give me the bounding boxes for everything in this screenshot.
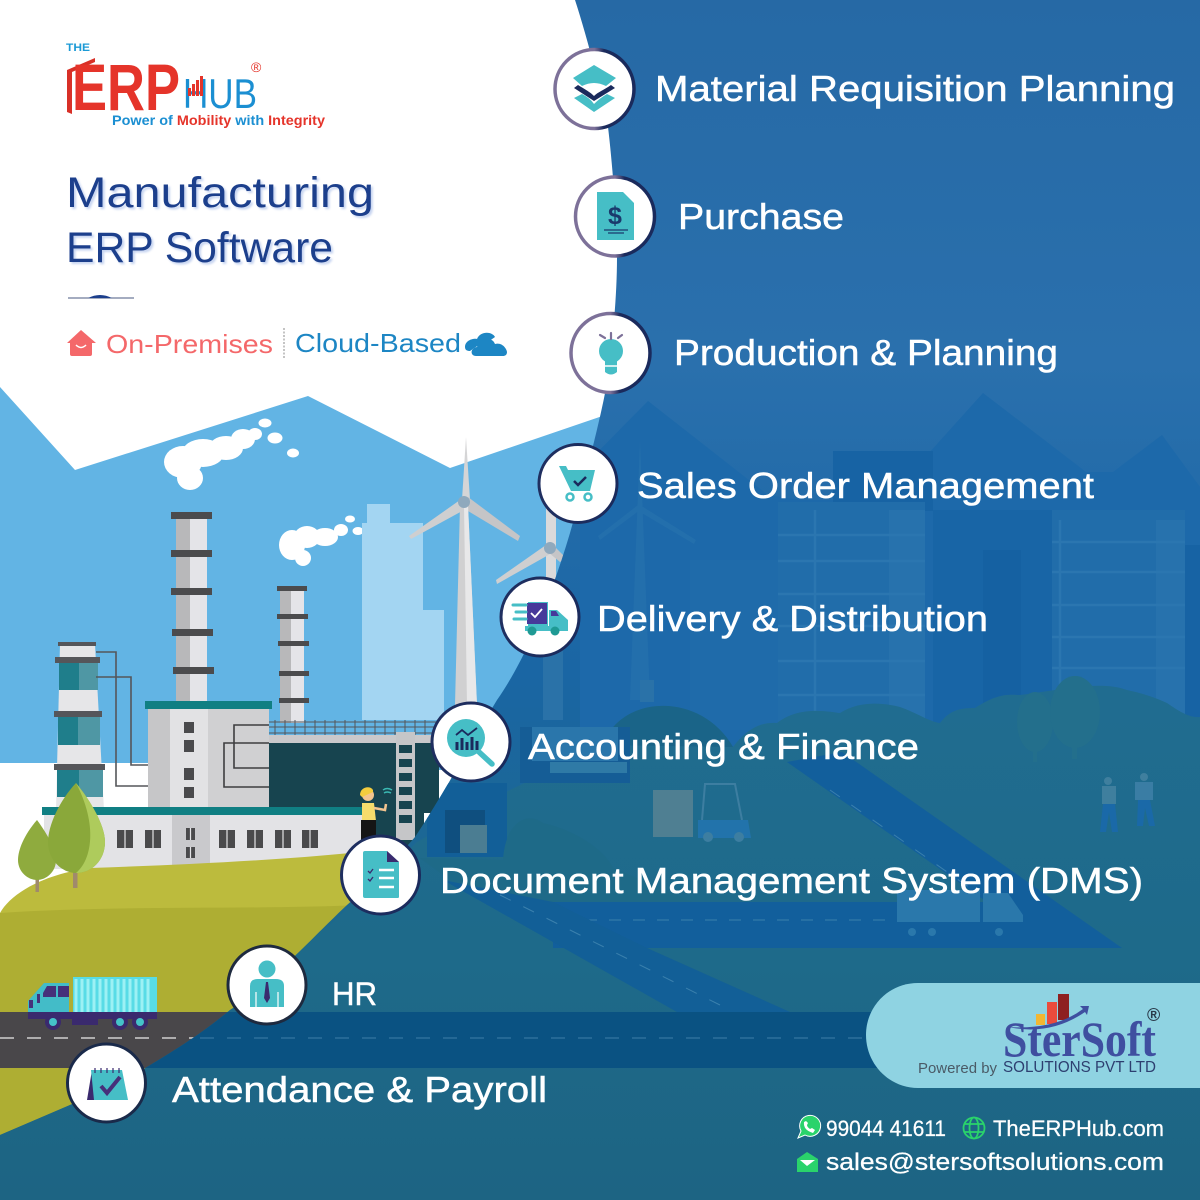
label: Attendance & Payroll (172, 1069, 547, 1110)
icon: magnifier chart (447, 719, 492, 764)
icon: whatsapp (798, 1115, 821, 1138)
label: Production & Planning (674, 332, 1058, 373)
icon circle (571, 314, 650, 392)
dark factory block with railing (269, 720, 440, 813)
diagonal road dashes (830, 790, 980, 895)
faded warehouse (427, 783, 507, 857)
item: Delivery & Distribution (501, 578, 988, 656)
item: HR (228, 946, 377, 1024)
dark block beside low building (364, 810, 424, 850)
logo: wordmark: SterSoft (1003, 1011, 1156, 1067)
faded factory block (520, 727, 630, 783)
title: Manufacturing (66, 169, 374, 217)
dotted divider (283, 328, 285, 358)
wind turbine large (409, 437, 520, 705)
icon: cloud (465, 333, 507, 356)
faded diagonal road (553, 752, 1122, 948)
item: Document Management System (DMS) (342, 836, 1143, 914)
background tower (362, 504, 444, 720)
deployment options (67, 328, 507, 359)
road (0, 1012, 260, 1068)
item: Production & Planning (571, 314, 1058, 392)
icon circle (228, 946, 306, 1024)
faded truck (897, 890, 1023, 936)
short chimney (277, 586, 309, 723)
powered by: Powered by (918, 1060, 997, 1077)
icon: dollar document (597, 192, 634, 240)
title underline ornament (68, 295, 134, 298)
icon circle (576, 177, 654, 256)
faded lower road (443, 880, 790, 1012)
icon: lightbulb (599, 333, 623, 374)
tree large (48, 783, 105, 888)
SterSoft logo pill (866, 983, 1200, 1088)
icon circle (539, 444, 617, 522)
icon: document checklist (363, 851, 399, 898)
logo: bars (1036, 994, 1069, 1025)
sky with zigzag top (0, 387, 620, 770)
logo: bars (188, 76, 203, 96)
striped teal chimney (54, 642, 105, 810)
ERP Hub logo (66, 42, 325, 128)
icon circle (501, 578, 579, 656)
low factory building (42, 807, 366, 869)
icon: layers (573, 65, 616, 112)
tree small (18, 820, 56, 892)
cloud-based label: Cloud-Based (295, 328, 461, 358)
logo: book spine (67, 58, 95, 114)
logo: ERP letters: ERP (72, 50, 180, 124)
icon: calendar check (87, 1068, 128, 1100)
item: Material Requisition Planning (555, 50, 1175, 128)
truck (28, 977, 157, 1030)
logo: arrow (1008, 1006, 1089, 1029)
phone: 99044 41611 (826, 1116, 946, 1141)
email: sales@stersoftsolutions.com (826, 1149, 1164, 1176)
logo: registered mark: ® (1147, 1005, 1160, 1025)
tall chimney (171, 512, 214, 705)
label: Delivery & Distribution (597, 598, 988, 639)
label: Sales Order Management (637, 465, 1094, 506)
wind turbine small (496, 500, 566, 600)
title: ERP Software (66, 224, 333, 272)
logo: the: THE (66, 42, 90, 54)
connecting pipes (96, 652, 151, 786)
solutions line: SOLUTIONS PVT LTD (1003, 1059, 1156, 1076)
icon: mail (797, 1152, 818, 1172)
title (66, 169, 374, 272)
item: Sales Order Management (539, 444, 1094, 522)
icon: dollar document: $ (608, 202, 622, 230)
faded turbine (598, 440, 696, 700)
smoke clouds (164, 418, 374, 566)
icon: globe (964, 1118, 984, 1138)
on-premises label: On-Premises (106, 329, 273, 359)
faded horizontal road dashes (589, 920, 885, 921)
lower road dashes (500, 895, 720, 1005)
white ground behind the factory (0, 763, 150, 923)
logo: tagline: Power of Mobility with Integrity (112, 112, 325, 128)
faded forklift and boxes (653, 784, 751, 842)
item: Attendance & Payroll (68, 1044, 547, 1122)
faded chimneys (543, 650, 654, 720)
logo: hub letters: HUB (183, 70, 257, 117)
faded hills and trees (0, 676, 1200, 1135)
icon: person with tie (250, 960, 284, 1008)
faded city buildings (778, 451, 1185, 718)
faded mountains (580, 393, 1200, 760)
icon circle (68, 1044, 146, 1122)
faded workers (1100, 773, 1155, 832)
worker with hard hat (360, 787, 392, 842)
icon circle (555, 50, 634, 128)
ladder (396, 732, 415, 840)
icon circle (342, 836, 420, 914)
contact details (797, 1115, 1164, 1176)
item: Purchase (576, 177, 844, 256)
icon circle (432, 703, 510, 781)
icon: delivery truck (513, 602, 568, 636)
label: Purchase (678, 196, 844, 237)
icon: cart (559, 466, 595, 500)
hill (0, 853, 360, 1140)
website: TheERPHub.com (993, 1116, 1164, 1141)
item: Accounting & Finance (432, 703, 919, 781)
label: HR (332, 976, 377, 1012)
label: Accounting & Finance (528, 726, 919, 767)
label: Material Requisition Planning (655, 68, 1175, 109)
main factory building (145, 701, 272, 808)
label: Document Management System (DMS) (440, 860, 1143, 901)
front hill bump (503, 840, 507, 857)
icon: house (67, 330, 96, 356)
overlay road (146, 1012, 877, 1068)
logo: registered mark: ® (251, 59, 262, 75)
